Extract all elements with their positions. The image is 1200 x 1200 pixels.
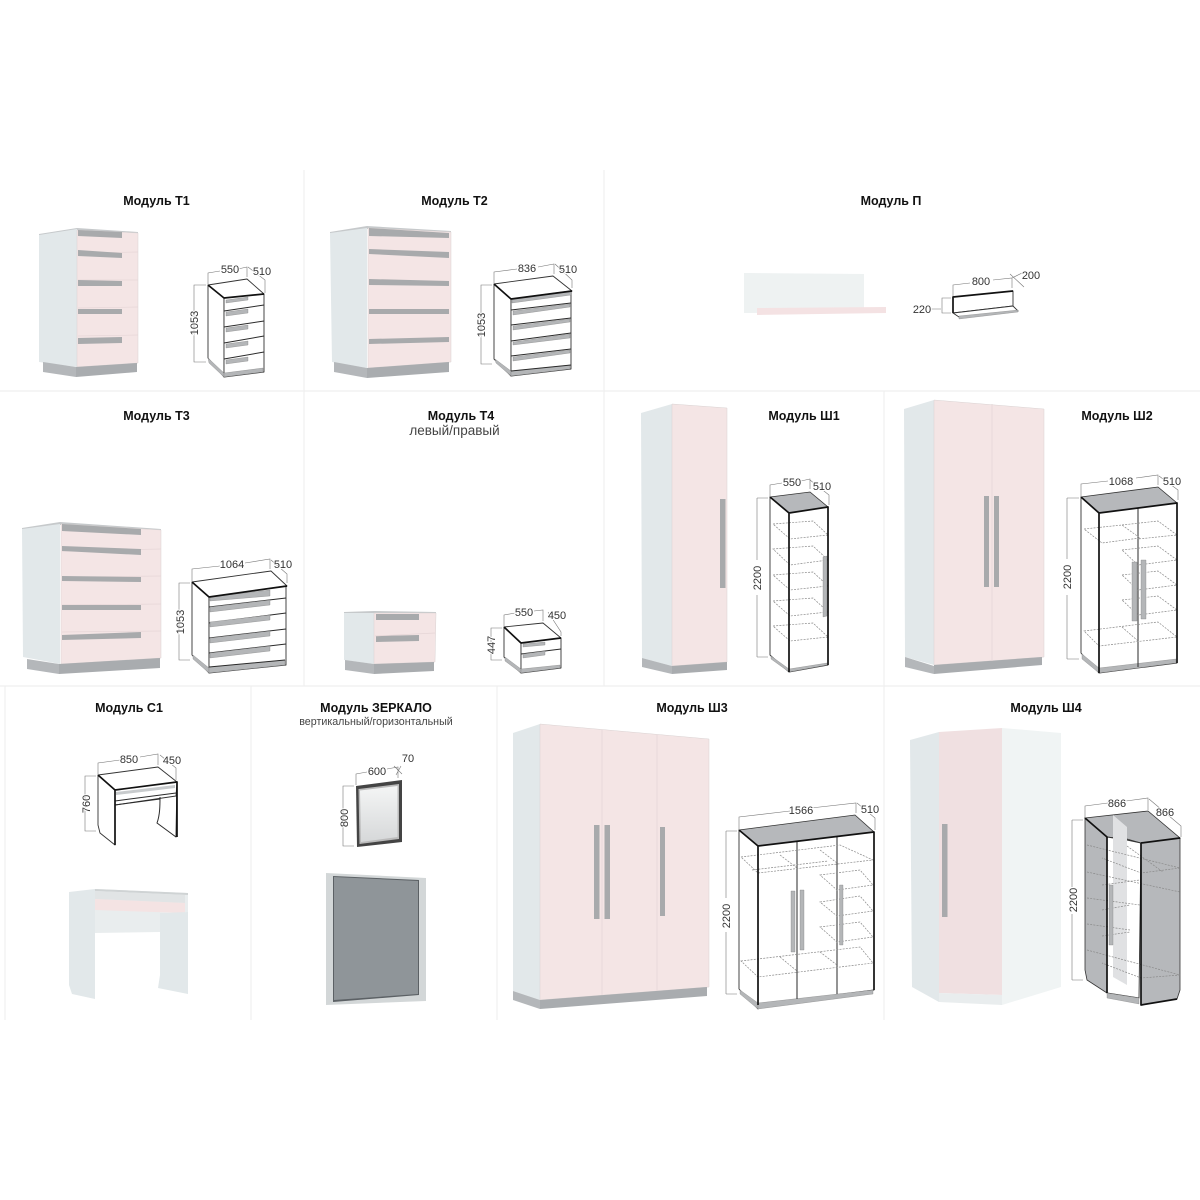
heading: C1: Модуль С1 — [95, 701, 163, 715]
line drawing: mirror with dimensions: 600 — [368, 766, 386, 778]
line drawing: T4 with dimensions: 450 — [548, 610, 566, 622]
line drawing: Sh2 with dimensions: 2200 — [1062, 565, 1074, 589]
heading: T1: Модуль Т1 — [123, 194, 190, 208]
heading: Sh1: Модуль Ш1 — [768, 409, 840, 423]
line drawing: Sh3 with dimensions: 1566 — [789, 805, 813, 817]
line drawing: Sh4 with dimensions: 2200 — [1068, 888, 1080, 912]
panel: module T1 — [39, 194, 271, 377]
line drawing: Sh1 with dimensions — [752, 477, 831, 672]
render: Sh1 wardrobe — [641, 404, 727, 674]
line drawing: T2 with dimensions: 1053 — [476, 313, 488, 337]
line drawing: T3 with dimensions: 1053 — [175, 610, 187, 634]
panel: module Sh3 — [513, 701, 879, 1009]
line drawing: mirror with dimensions — [339, 753, 414, 847]
line drawing: T3 with dimensions — [175, 559, 292, 673]
line drawing: Sh3 with dimensions: 510 — [861, 804, 879, 816]
line drawing: T1 with dimensions: 1053 — [189, 311, 201, 335]
line drawing: T3 with dimensions: 1064 — [220, 559, 244, 571]
line drawing: Sh4 with dimensions: 866 — [1156, 807, 1174, 819]
line drawing: mirror with dimensions: 800 — [339, 809, 351, 827]
line drawing: T2 with dimensions: 836 — [518, 263, 536, 275]
line drawing: C1 desk with dimensions: 760 — [81, 795, 93, 813]
line drawing: P with dimensions: 220 — [913, 304, 931, 316]
line drawing: T4 with dimensions — [486, 607, 566, 673]
line drawing: Sh4 with dimensions: 866 — [1108, 798, 1126, 810]
panel: module Sh4 — [910, 701, 1181, 1005]
line drawing: T2 with dimensions: 510 — [559, 264, 577, 276]
heading: mirror: Модуль ЗЕРКАЛО — [320, 701, 432, 715]
render: Sh3 wardrobe — [513, 724, 709, 1009]
line drawing: Sh1 with dimensions: 550 — [783, 477, 801, 489]
line drawing: T1 with dimensions — [189, 264, 271, 377]
line drawing: Sh2 with dimensions: 510 — [1163, 476, 1181, 488]
render: T4 bedside table — [344, 611, 436, 674]
render: T1 chest of drawers — [39, 228, 138, 377]
line drawing: Sh4 with dimensions — [1068, 798, 1181, 1005]
line drawing: T4 with dimensions: 447 — [486, 636, 498, 654]
line drawing: P with dimensions: 200 — [1022, 270, 1040, 282]
heading: T3: Модуль Т3 — [123, 409, 190, 423]
line drawing: T1 with dimensions: 510 — [253, 266, 271, 278]
panel: module Sh1 — [641, 404, 840, 674]
line drawing: Sh1 with dimensions: 510 — [813, 481, 831, 493]
panel: module T3 — [22, 409, 292, 674]
panel: module P — [744, 194, 1040, 319]
render: C1 desk — [69, 889, 188, 999]
heading: T4: Модуль Т4 — [428, 409, 494, 423]
line drawing: P with dimensions: 800 — [972, 276, 990, 288]
line drawing: mirror with dimensions: 70 — [402, 753, 414, 765]
panel: module mirror — [299, 701, 453, 1005]
panel: module Sh2 — [904, 400, 1181, 674]
line drawing: Sh2 with dimensions — [1062, 475, 1181, 673]
line drawing: T4 with dimensions: 550 — [515, 607, 533, 619]
subheading: T4: левый/правый — [409, 423, 500, 438]
line drawing: Sh2 with dimensions: 1068 — [1109, 476, 1133, 488]
panel: module T2 — [330, 194, 577, 378]
render: T2 chest of drawers — [330, 226, 451, 378]
heading: P: Модуль П — [861, 194, 921, 208]
render: mirror — [326, 873, 426, 1005]
line drawing: T3 with dimensions: 510 — [274, 559, 292, 571]
line drawing: Sh3 with dimensions: 2200 — [721, 904, 733, 928]
render: T3 chest of drawers — [22, 522, 161, 674]
line drawing: Sh3 with dimensions — [721, 803, 879, 1009]
heading: Sh2: Модуль Ш2 — [1081, 409, 1153, 423]
render: Sh2 wardrobe — [904, 400, 1044, 674]
heading: Sh4: Модуль Ш4 — [1010, 701, 1082, 715]
render: Sh4 corner wardrobe — [910, 728, 1061, 1005]
heading: Sh3: Модуль Ш3 — [656, 701, 728, 715]
line drawing: C1 desk with dimensions — [81, 754, 181, 845]
line drawing: C1 desk with dimensions: 450 — [163, 755, 181, 767]
heading: T2: Модуль Т2 — [421, 194, 488, 208]
line drawing: P with dimensions — [913, 270, 1040, 319]
render: P wall shelf — [744, 273, 886, 315]
panel: module T4 — [344, 409, 566, 674]
line drawing: Sh1 with dimensions: 2200 — [752, 566, 764, 590]
line drawing: T2 with dimensions — [476, 263, 577, 376]
panel: module C1 — [69, 701, 188, 999]
line drawing: C1 desk with dimensions: 850 — [120, 754, 138, 766]
subheading: mirror: вертикальный/горизонтальный — [299, 716, 453, 728]
line drawing: T1 with dimensions: 550 — [221, 264, 239, 276]
